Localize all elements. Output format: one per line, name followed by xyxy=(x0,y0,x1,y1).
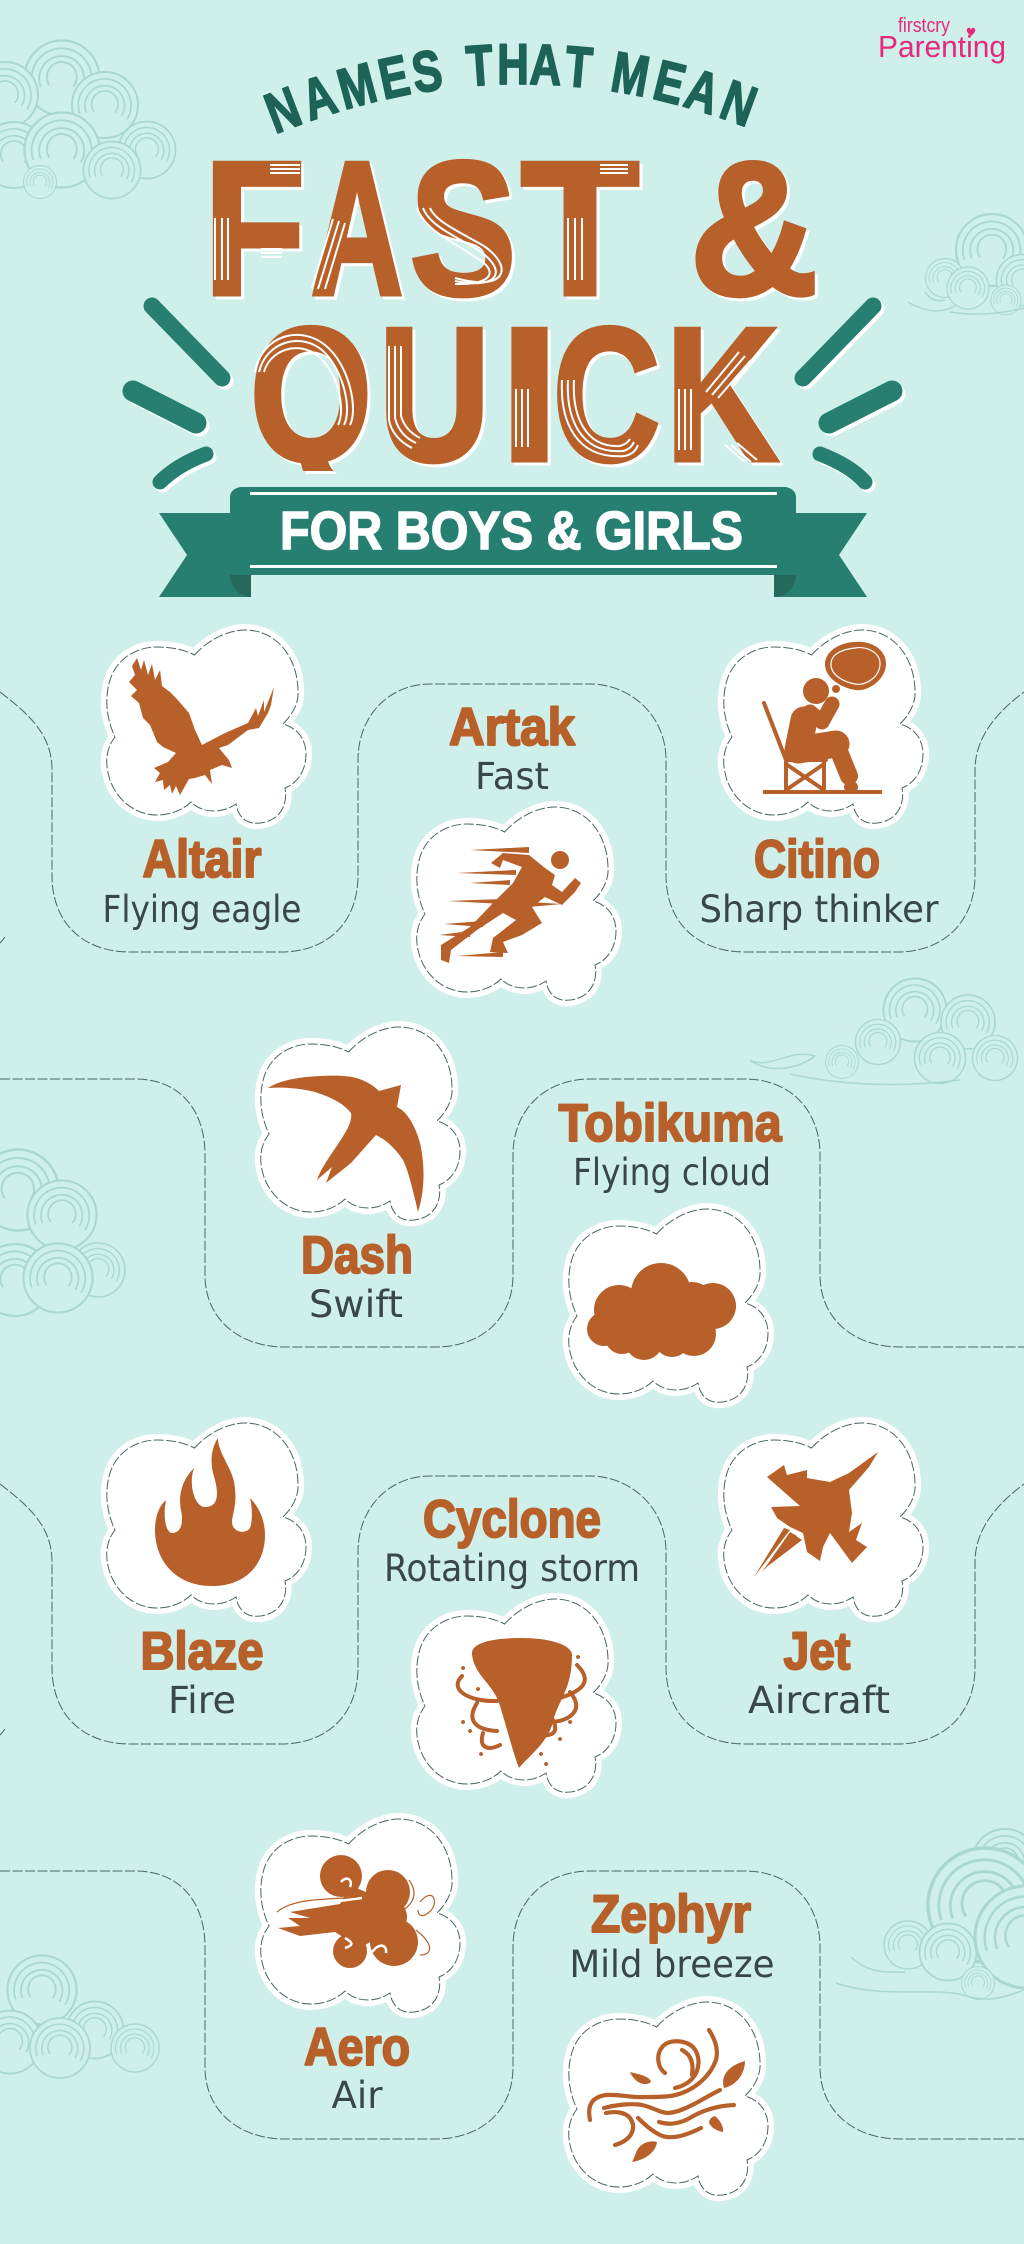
title: names that mean: S xyxy=(407,37,446,105)
entry: Blaze xyxy=(107,1423,306,1722)
ribbon text: FOR BOYS & GIRLS xyxy=(280,501,743,561)
meaning: Rotating storm: Rotating storm xyxy=(384,1547,640,1590)
name: Citino: Citino xyxy=(754,830,880,889)
logo: FirstCry Parenting: Parenting xyxy=(878,29,1006,64)
stripes on FAST xyxy=(215,165,628,289)
icon: jet aircraft xyxy=(754,1452,878,1577)
name: Tobikuma: Tobikuma xyxy=(558,1094,782,1153)
name: Cyclone: Cyclone xyxy=(423,1490,601,1549)
name: Artak: Artak xyxy=(449,698,575,757)
title: names that mean: H xyxy=(497,32,529,96)
entry: Altair xyxy=(102,630,306,931)
title: names that mean: E xyxy=(373,43,415,112)
heading: FAST &: T xyxy=(521,123,639,335)
dashed path: row four xyxy=(0,1871,1024,2139)
icon: breeze with leaves xyxy=(589,2030,745,2162)
icon: thinker xyxy=(763,642,886,794)
heading: QUICK: K xyxy=(666,289,778,501)
heading: QUICK: U xyxy=(379,289,490,501)
decorative cloud: right of row one xyxy=(750,978,1018,1085)
title: names that mean: T xyxy=(464,33,495,98)
meaning: Aircraft: Aircraft xyxy=(748,1679,890,1722)
decorative cloud: left of row two xyxy=(0,1150,125,1316)
heading: QUICK: I xyxy=(500,289,559,501)
icon: eagle xyxy=(129,658,274,795)
entry: Jet xyxy=(724,1423,923,1722)
decorative cloud: bottom left xyxy=(0,1956,159,2078)
ribbon banner xyxy=(159,487,867,597)
name: Aero: Aero xyxy=(304,2018,410,2077)
title: names that mean: M xyxy=(607,40,654,109)
dashed path: row two xyxy=(0,1079,1024,1347)
meaning: Air: Air xyxy=(332,2074,383,2117)
stripes on QUICK xyxy=(255,335,757,462)
logo: FirstCry Parenting xyxy=(878,15,1006,64)
title: names that mean xyxy=(257,32,765,146)
rays: right xyxy=(803,306,892,482)
meaning: Fast: Fast xyxy=(475,755,549,798)
heading: FAST &: A xyxy=(311,123,403,335)
title: names that mean: A xyxy=(294,62,344,133)
name: Zephyr: Zephyr xyxy=(591,1885,751,1944)
meaning: Fire: Fire xyxy=(168,1679,236,1722)
heading: FAST &: F xyxy=(204,123,305,335)
meaning: Flying cloud: Flying cloud xyxy=(573,1151,771,1194)
heading: QUICK: Q xyxy=(250,289,372,501)
meaning: Swift: Swift xyxy=(309,1283,403,1326)
meaning: Flying eagle: Flying eagle xyxy=(102,888,302,931)
entry: Zephyr xyxy=(569,1885,774,2195)
title: names that mean: M xyxy=(331,50,383,122)
title: names that mean: A xyxy=(678,56,727,127)
title: names that mean: A xyxy=(529,32,563,97)
icon: runner xyxy=(439,847,581,963)
rays: left xyxy=(133,306,222,482)
entry: Citino xyxy=(700,630,939,931)
decorative cloud: right of title xyxy=(908,214,1024,315)
icon: tornado xyxy=(458,1638,585,1768)
meaning: Sharp thinker: Sharp thinker xyxy=(700,888,939,931)
meaning: Mild breeze: Mild breeze xyxy=(570,1943,774,1986)
name: Blaze: Blaze xyxy=(140,1622,264,1681)
title: names that mean: N xyxy=(713,68,765,139)
title: names that mean: N xyxy=(257,74,309,146)
icon: flame xyxy=(155,1438,265,1586)
icon: wind swirl xyxy=(277,1855,434,1968)
heading: QUICK xyxy=(254,324,784,474)
heading: FAST &: S xyxy=(410,123,516,335)
dashed path: row one xyxy=(0,684,1024,952)
title: names that mean: E xyxy=(648,48,692,117)
icon: cloud xyxy=(587,1263,736,1360)
heading: QUICK: C xyxy=(553,289,660,501)
entry: Tobikuma xyxy=(558,1094,782,1402)
entry: Cyclone xyxy=(384,1490,640,1792)
name: Altair: Altair xyxy=(142,830,262,889)
entry: Artak xyxy=(417,698,616,1000)
logo: FirstCry Parenting: firstcry xyxy=(898,15,950,37)
heading: FAST & xyxy=(204,123,818,335)
heading: FAST &: & xyxy=(690,123,818,335)
decorative cloud: bottom right xyxy=(836,1829,1024,2000)
entry: Aero xyxy=(261,1819,460,2117)
name: Jet: Jet xyxy=(784,1622,850,1681)
title: names that mean: T xyxy=(563,34,595,100)
name: Dash: Dash xyxy=(301,1226,413,1285)
icon: swift bird xyxy=(268,1076,424,1212)
dashed path: row three xyxy=(0,1476,1024,1744)
entry: Dash xyxy=(261,1027,460,1326)
decorative cloud: top left xyxy=(0,40,176,198)
